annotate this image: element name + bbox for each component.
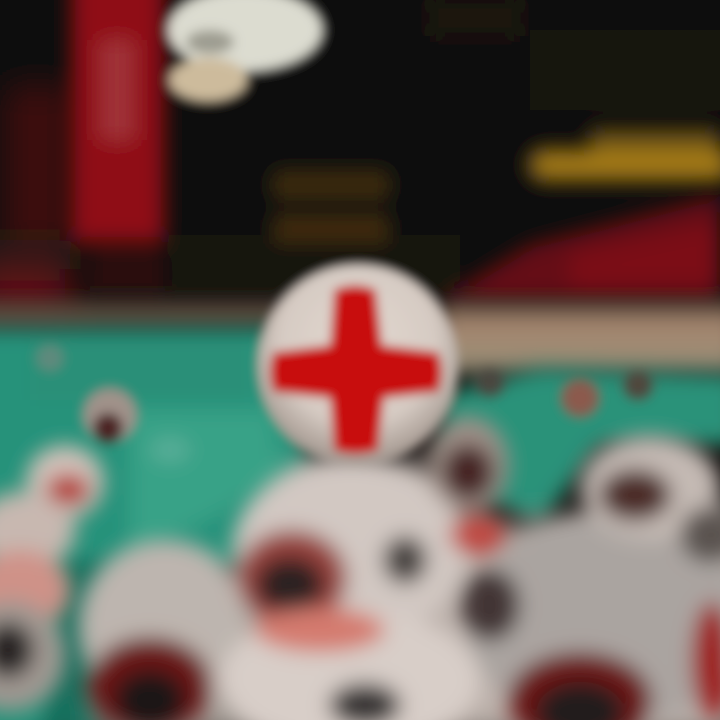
red cross [270,285,442,454]
green table [0,328,720,720]
ball body [258,265,458,465]
red banner [72,0,165,295]
bottom pile of balls [80,417,720,720]
base under lower balls [100,465,720,720]
tan table edge [0,303,720,373]
red stand at right [440,195,720,300]
gold signage [272,0,720,244]
white overhead light [167,0,323,102]
main ball with red cross [258,265,458,465]
left pile of balls [0,446,103,710]
background: dark arena wall [0,0,720,315]
small distant balls [36,344,653,443]
